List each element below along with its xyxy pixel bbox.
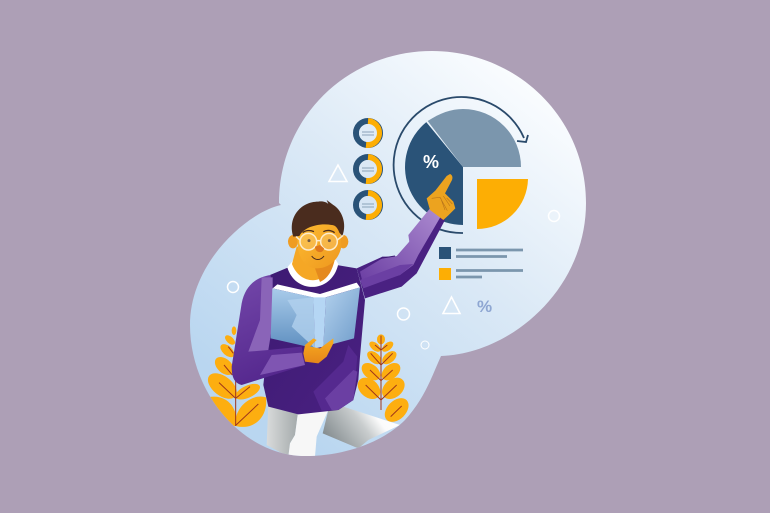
left arm sleeve xyxy=(232,275,305,385)
leg left grey xyxy=(266,406,298,454)
book pages top xyxy=(273,283,360,299)
ears xyxy=(288,235,298,248)
hand pointing xyxy=(427,174,455,220)
legend swatch: blue xyxy=(439,247,451,259)
legend lines 1 xyxy=(456,250,523,256)
circle left xyxy=(228,282,238,292)
leg left white xyxy=(288,410,328,457)
circular arrow xyxy=(394,97,528,233)
book page light fold xyxy=(287,297,315,348)
background blob xyxy=(190,51,586,456)
raised arm xyxy=(357,208,445,298)
book spine xyxy=(313,297,326,348)
pie chart xyxy=(405,109,528,229)
legend lines 2 xyxy=(456,270,523,277)
person and plants xyxy=(203,174,455,457)
hand holding book xyxy=(303,338,333,363)
legend swatch: orange xyxy=(439,268,451,280)
eyebrows xyxy=(303,231,335,233)
pie slice: orange xyxy=(477,179,528,229)
neck and collar xyxy=(287,247,338,287)
circle middle xyxy=(398,308,410,320)
legend xyxy=(439,247,523,280)
book left page xyxy=(271,288,315,348)
glasses xyxy=(296,233,343,250)
face xyxy=(297,223,341,268)
donut 3 xyxy=(356,193,380,217)
smile xyxy=(312,256,324,259)
donut 2 xyxy=(356,157,380,181)
leg right xyxy=(323,407,400,448)
hair xyxy=(292,200,344,237)
plant left xyxy=(203,326,266,427)
triangle left xyxy=(329,165,347,182)
triangle lower xyxy=(443,297,460,314)
donut icons xyxy=(356,121,380,217)
decorative triangles and circles xyxy=(228,165,560,349)
head xyxy=(288,200,348,268)
donut 1 xyxy=(356,121,380,145)
eyes xyxy=(307,239,310,242)
percent symbol: % xyxy=(477,297,492,316)
pie slice: dark blue xyxy=(405,122,463,225)
circle right xyxy=(548,210,560,222)
percent label: % xyxy=(423,152,439,172)
sweater highlight light xyxy=(325,370,357,410)
nose xyxy=(315,245,324,252)
legs xyxy=(267,403,400,457)
sweater highlight xyxy=(313,345,357,411)
pie slice: grey blue xyxy=(428,109,521,167)
book right page xyxy=(323,287,360,347)
infographic illustration xyxy=(190,51,586,456)
book xyxy=(271,283,360,348)
sweater torso xyxy=(263,265,365,414)
plant right xyxy=(358,334,409,422)
circle small xyxy=(421,341,429,349)
